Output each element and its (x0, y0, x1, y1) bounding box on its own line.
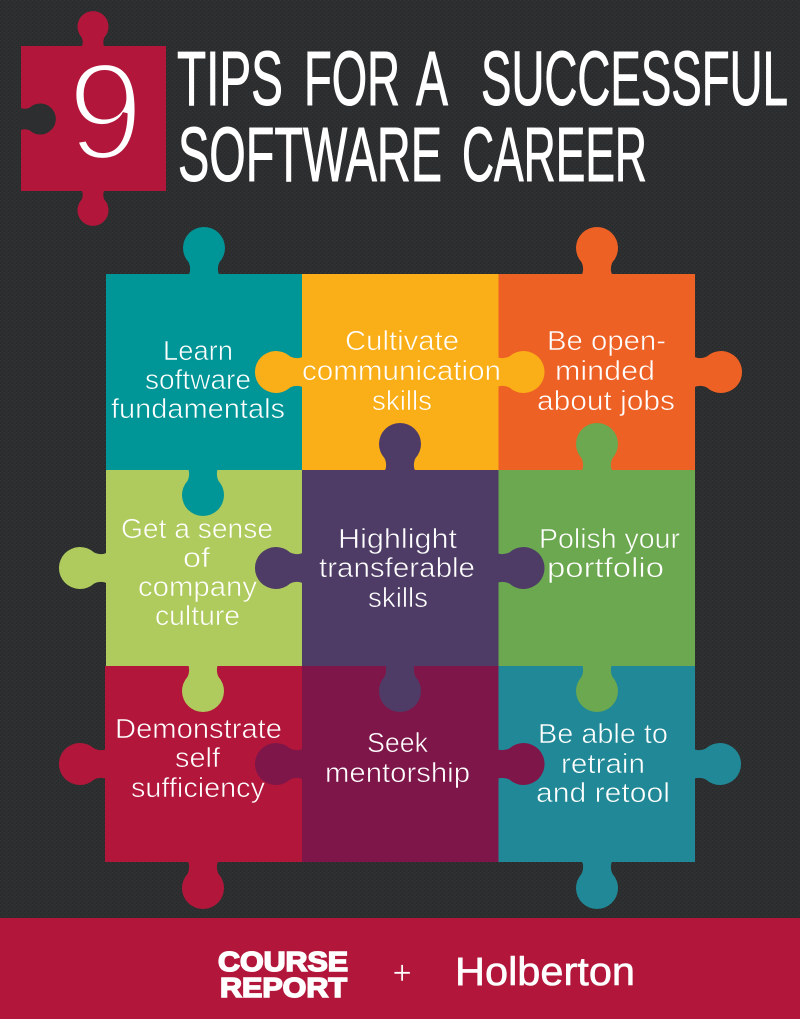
tip text: highlight transferable skills: transferable (319, 552, 475, 583)
tip text: cultivate communication skills: communication (302, 355, 501, 386)
tip text: cultivate communication skills: Cultivate (345, 325, 459, 356)
tip text: be able to retrain and retool: Be able to (538, 718, 668, 749)
title: SOFTWARE (178, 112, 442, 198)
tip text: get a sense of company culture: culture (155, 600, 240, 631)
puzzle grid (59, 227, 742, 909)
panel: demonstrate self sufficiency (59, 666, 302, 909)
tip text: be open-minded about jobs: about jobs (537, 385, 675, 416)
tip text: be able to retrain and retool: retrain (561, 748, 645, 779)
title: CAREER (462, 112, 647, 198)
tip text: be able to retrain and retool: and retool (536, 777, 670, 808)
logo: number 9 puzzle piece: 9 (68, 35, 144, 189)
tip text: get a sense of company culture: company (138, 571, 257, 602)
tip text: get a sense of company culture (121, 513, 273, 631)
tip text: polish your portfolio (539, 523, 680, 583)
tip text: cultivate communication skills: skills (372, 385, 432, 416)
tip text: highlight transferable skills: skills (368, 582, 428, 613)
footer band (0, 918, 800, 1019)
tip text: seek mentorship: mentorship (325, 757, 470, 788)
tip text: cultivate communication skills (302, 325, 501, 416)
panel: get a sense of company culture (59, 470, 302, 666)
interlocking puzzle tabs (182, 351, 618, 785)
tip text: demonstrate self sufficiency: self (175, 742, 220, 773)
tip text: polish your portfolio: portfolio (547, 552, 664, 583)
tip text: highlight transferable skills: Highlight (338, 523, 457, 554)
tip text: polish your portfolio: Polish your (539, 523, 680, 554)
tip text: learn software fundamentals: software (145, 364, 251, 395)
title: A (416, 36, 448, 122)
tip text: learn software fundamentals (111, 335, 285, 424)
tip text: demonstrate self sufficiency: sufficiency (131, 772, 265, 803)
title (177, 36, 788, 198)
logo: number 9 puzzle piece (20, 11, 166, 226)
tip text: learn software fundamentals: Learn (163, 335, 233, 366)
logo: Course Report: REPORT (220, 972, 347, 1003)
tip text: demonstrate self sufficiency: Demonstrate (115, 713, 282, 744)
tip text: be open-minded about jobs: Be open- (547, 325, 666, 356)
logo: Holberton: Holberton (455, 950, 635, 994)
title: TIPS (177, 36, 283, 122)
panel: polish your portfolio (498, 470, 695, 666)
panel: seek mentorship (302, 666, 498, 862)
tip text: seek mentorship: Seek (367, 727, 429, 758)
tip text: be open-minded about jobs (537, 325, 675, 416)
logo: Course Report: COURSE (218, 946, 348, 977)
plus sign: + (392, 954, 412, 991)
tip text: demonstrate self sufficiency (115, 713, 282, 803)
panel: be open-minded about jobs (498, 227, 742, 470)
panel: learn software fundamentals (106, 227, 302, 470)
tip text: be open-minded about jobs: minded (555, 355, 655, 386)
tip text: get a sense of company culture: of (183, 542, 210, 573)
panel: cultivate communication skills (302, 274, 498, 470)
tip text: learn software fundamentals: fundamentals (111, 393, 285, 424)
tip text: seek mentorship (325, 727, 470, 788)
panel: highlight transferable skills (302, 470, 498, 666)
panel: be able to retrain and retool (498, 666, 741, 909)
tip text: get a sense of company culture: Get a sense (121, 513, 273, 544)
title: FOR (304, 36, 400, 122)
logo: Course Report (218, 946, 348, 1003)
tip text: highlight transferable skills (319, 523, 475, 613)
tip text: be able to retrain and retool (536, 718, 670, 808)
